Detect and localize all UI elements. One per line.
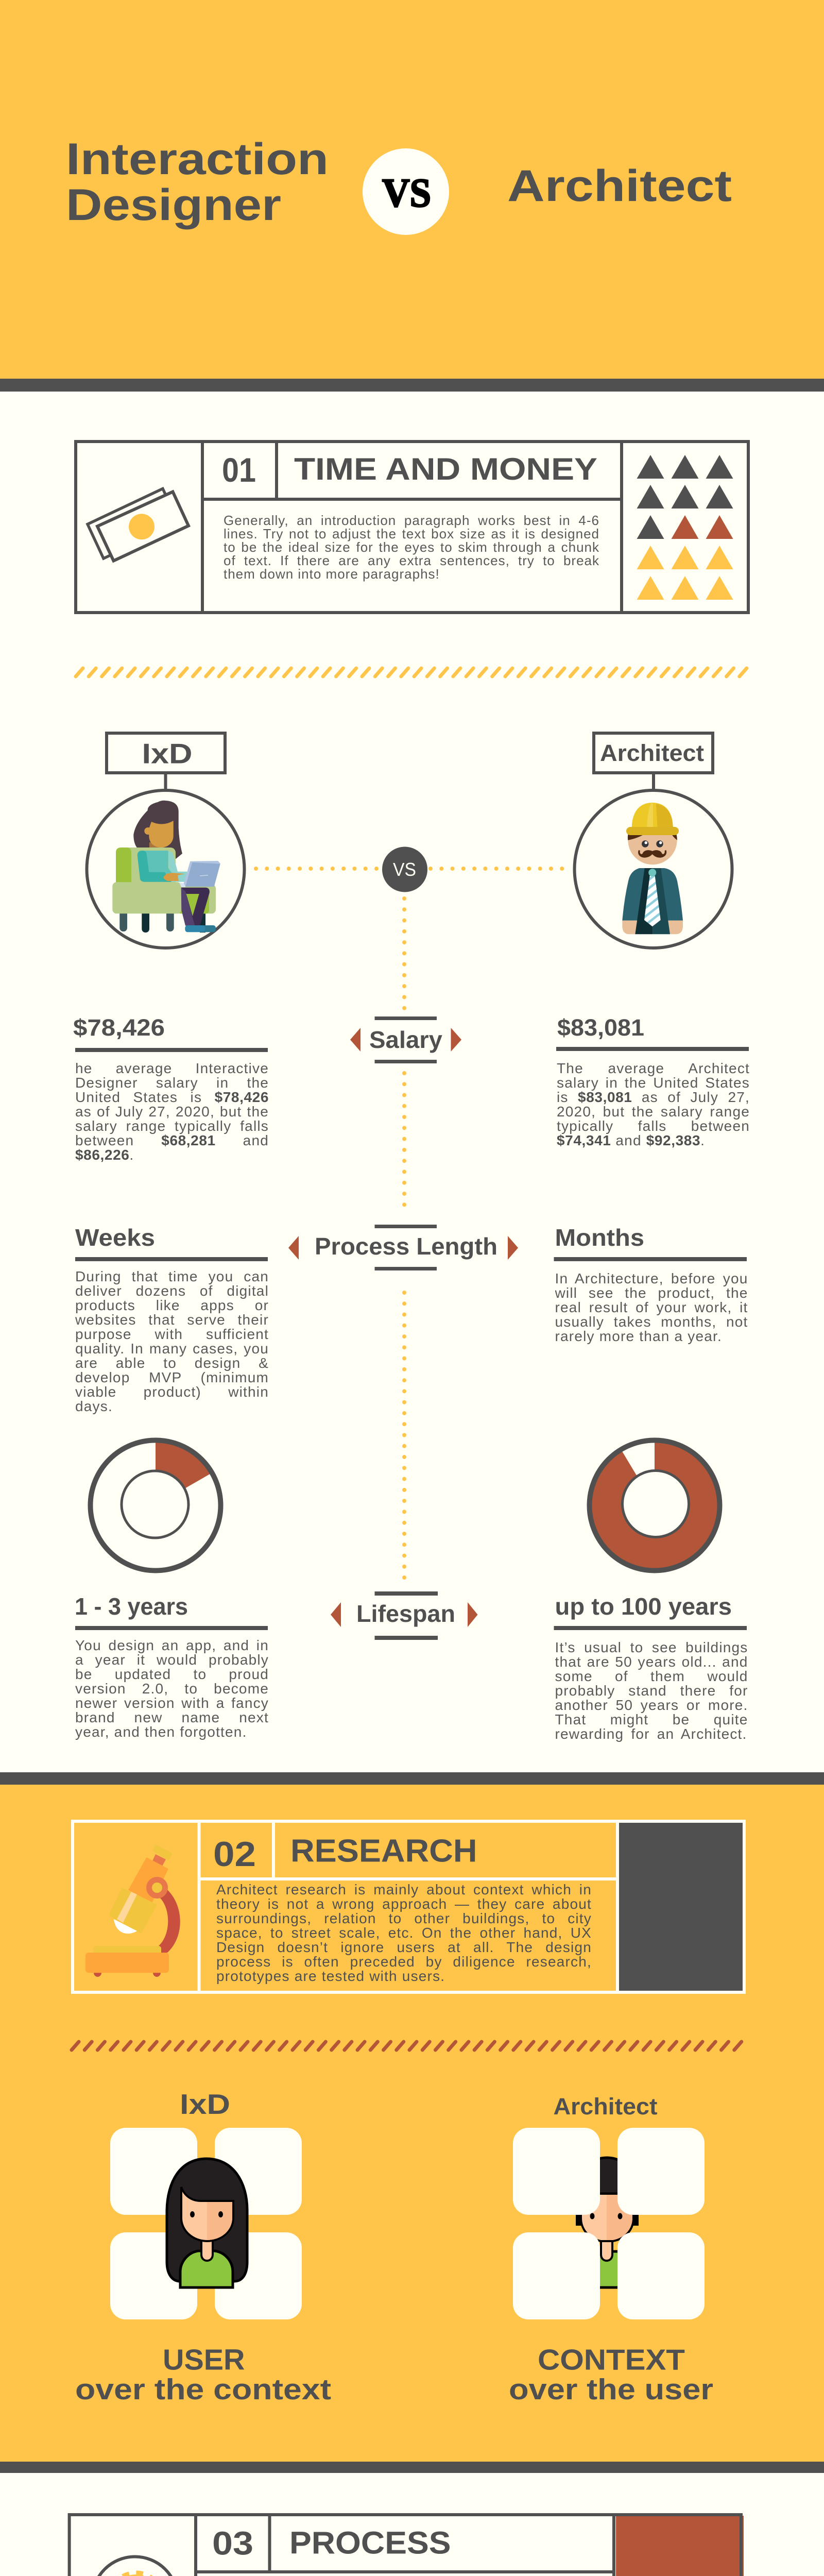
text: intro paragraph xyxy=(224,514,599,586)
text: lifespan Architect: probably stand there for xyxy=(555,1683,748,1698)
title: Architect: Architect xyxy=(507,161,732,211)
label box: Architect: Architect xyxy=(600,740,704,766)
text: lifespan Architect: that are 50 years old... and xyxy=(555,1654,748,1669)
section number 03: 03 xyxy=(212,2524,253,2562)
caption: context over the user: over the user xyxy=(509,2373,713,2406)
label: salary xyxy=(350,1016,461,1063)
text: weeks: are able to design & xyxy=(75,1355,269,1371)
label: lifespan xyxy=(331,1591,478,1640)
heading: Architect salary: $83,081 xyxy=(557,1014,644,1041)
icon: money bills xyxy=(88,488,188,561)
icon: gear in circle xyxy=(92,2556,178,2576)
text: IxD salary: $86,226. xyxy=(75,1147,134,1163)
heading: IxD salary xyxy=(73,1014,268,1052)
comparison: IxD user focus xyxy=(75,2088,331,2406)
tiles: four squares xyxy=(110,2128,302,2319)
text: months: will see the product, the xyxy=(555,1285,748,1301)
text: lifespan IxD: be updated to proud xyxy=(75,1666,269,1682)
label: IxD: IxD xyxy=(180,2088,230,2120)
label: salary: Salary xyxy=(369,1026,442,1053)
tiles: four squares over avatar xyxy=(513,2128,705,2319)
avatar: woman xyxy=(167,2159,247,2287)
text: weeks: purpose with sufficient xyxy=(75,1326,269,1342)
heading: up to 100 years: up to 100 years xyxy=(555,1593,732,1620)
chart: donut lifespan IxD xyxy=(91,1440,220,1570)
heading: weeks xyxy=(75,1224,268,1261)
label box: IxD xyxy=(107,733,225,773)
title banner xyxy=(66,134,732,235)
caption: user over the context: over the context xyxy=(75,2373,331,2406)
badge: VS connector xyxy=(382,847,427,892)
caption: user over the context: USER xyxy=(163,2343,245,2376)
heading: process: PROCESS xyxy=(289,2526,451,2561)
portrait: male architect xyxy=(575,790,732,948)
title: Interaction Designer: Designer xyxy=(66,180,281,230)
text: lifespan Architect: That might be quite xyxy=(555,1711,748,1727)
heading: IxD salary: $78,426 xyxy=(73,1014,165,1041)
icon: triangle grid xyxy=(637,455,733,600)
label box: IxD: IxD xyxy=(142,738,193,770)
text: weeks xyxy=(75,1269,269,1416)
text: months xyxy=(555,1272,748,1346)
text: weeks: days. xyxy=(75,1398,113,1414)
heading: Architect salary xyxy=(556,1014,749,1051)
text: research paragraph: Design doesn’t ignore users at all. The design xyxy=(216,1939,592,1955)
text: intro paragraph: them down into more paragraphs! xyxy=(224,566,440,582)
text: research paragraph xyxy=(216,1883,592,1986)
text: Architect salary: is $83,081 as of July 27, xyxy=(557,1089,750,1105)
text: months: rarely more than a year. xyxy=(555,1328,722,1344)
caption: context over the user xyxy=(509,2343,713,2406)
caption: context over the user: CONTEXT xyxy=(538,2343,685,2376)
badge: VS connector: VS xyxy=(393,859,416,880)
comparison: Architect context focus xyxy=(509,2093,713,2406)
text: IxD salary: as of July 27, 2020, but the xyxy=(75,1104,269,1120)
text: lifespan IxD xyxy=(75,1638,269,1741)
label: process length xyxy=(288,1225,518,1270)
text: intro paragraph: lines. Try not to adjust the text box size as it is designed xyxy=(224,526,599,541)
comparison header: Architect xyxy=(575,733,732,948)
text: research paragraph: space, to street scale, etc. On the other hand, UX xyxy=(216,1925,592,1941)
panel: 02 research xyxy=(73,1821,744,1992)
avatar: man behind tiles xyxy=(576,2158,639,2287)
text: Architect salary: typically falls between xyxy=(557,1118,750,1134)
label box: Architect xyxy=(594,733,713,773)
text: lifespan Architect xyxy=(555,1640,748,1743)
panel: 03 process xyxy=(70,2515,744,2576)
text: months: real result of your work, it xyxy=(555,1299,748,1315)
heading: months: Months xyxy=(555,1224,644,1251)
text: intro paragraph: to be the ideal size for the eyes to skim through a chunk xyxy=(224,539,599,555)
text: IxD salary: United States is $78,426 xyxy=(75,1089,269,1105)
text: lifespan Architect: another 50 years or more. xyxy=(555,1697,748,1713)
text: intro paragraph: of text. If there are any extra sentences, try to break xyxy=(224,553,599,568)
row: process length xyxy=(75,1224,748,1416)
text: research paragraph: surroundings, relation to other buildings, to city xyxy=(216,1910,592,1926)
text: IxD salary: salary range typically falls xyxy=(75,1118,269,1134)
row: lifespan xyxy=(75,1591,748,1743)
title: Interaction Designer: Interaction xyxy=(66,134,329,184)
text: lifespan IxD: a year it would probably xyxy=(75,1652,269,1667)
comparison header: IxD xyxy=(87,733,244,948)
badge: VS: VS xyxy=(382,170,431,215)
text: months: usually takes months, not xyxy=(555,1314,748,1330)
text: weeks: websites that serve their xyxy=(75,1312,269,1328)
text: IxD salary: Designer salary in the xyxy=(75,1075,269,1091)
text: IxD salary xyxy=(75,1061,269,1164)
text: lifespan IxD: newer version with a fancy xyxy=(75,1695,269,1710)
heading: research: RESEARCH xyxy=(290,1833,477,1869)
panel: 01 time and money xyxy=(76,442,748,613)
heading: up to 100 years xyxy=(554,1593,747,1630)
title: Interaction Designer xyxy=(66,134,329,230)
text: Architect salary: 2020, but the salary range xyxy=(557,1104,750,1120)
text: Architect salary xyxy=(557,1061,750,1151)
text: weeks: viable product) within xyxy=(75,1384,269,1400)
text: lifespan IxD: brand new name next xyxy=(75,1709,269,1725)
section number 01: 01 xyxy=(222,451,256,489)
heading: months xyxy=(554,1224,747,1261)
row: salary xyxy=(73,1014,750,1164)
label: lifespan: Lifespan xyxy=(356,1600,455,1627)
portrait: woman designer xyxy=(87,790,244,948)
label: Architect: Architect xyxy=(553,2093,658,2120)
caption: user over the context xyxy=(75,2343,331,2406)
text: lifespan IxD: year, and then forgotten. xyxy=(75,1724,247,1739)
text: research paragraph: prototypes are tested with users. xyxy=(216,1968,445,1984)
text: lifespan Architect: rewarding for an Architect. xyxy=(555,1726,747,1741)
text: Architect salary: $74,341 and $92,383. xyxy=(557,1132,705,1148)
heading: weeks: Weeks xyxy=(75,1224,155,1251)
chart: donut lifespan Architect xyxy=(589,1433,720,1570)
heading: time and money: TIME AND MONEY xyxy=(294,452,597,486)
text: lifespan Architect: some of them would xyxy=(555,1668,748,1684)
text: IxD salary: between $68,281 and xyxy=(75,1132,269,1148)
text: lifespan IxD: version 2.0, to become xyxy=(75,1681,269,1696)
text: weeks: quality. In many cases, you xyxy=(75,1341,269,1357)
text: weeks: develop MVP (minimum xyxy=(75,1369,269,1385)
label: process length: Process Length xyxy=(315,1233,497,1260)
heading: 1 - 3 years: 1 - 3 years xyxy=(75,1593,188,1620)
icon: microscope xyxy=(85,1845,180,1977)
text: research paragraph: theory is not a wrong approach — they care about xyxy=(216,1896,592,1912)
text: research paragraph: process is often preceded by diligence research, xyxy=(216,1954,592,1970)
badge: VS xyxy=(363,148,449,235)
heading: 1 - 3 years xyxy=(75,1593,268,1630)
text: Architect salary: salary in the United States xyxy=(557,1075,750,1091)
text: weeks: deliver dozens of digital xyxy=(75,1283,269,1299)
text: weeks: products like apps or xyxy=(75,1297,269,1313)
section number 02: 02 xyxy=(213,1835,256,1874)
